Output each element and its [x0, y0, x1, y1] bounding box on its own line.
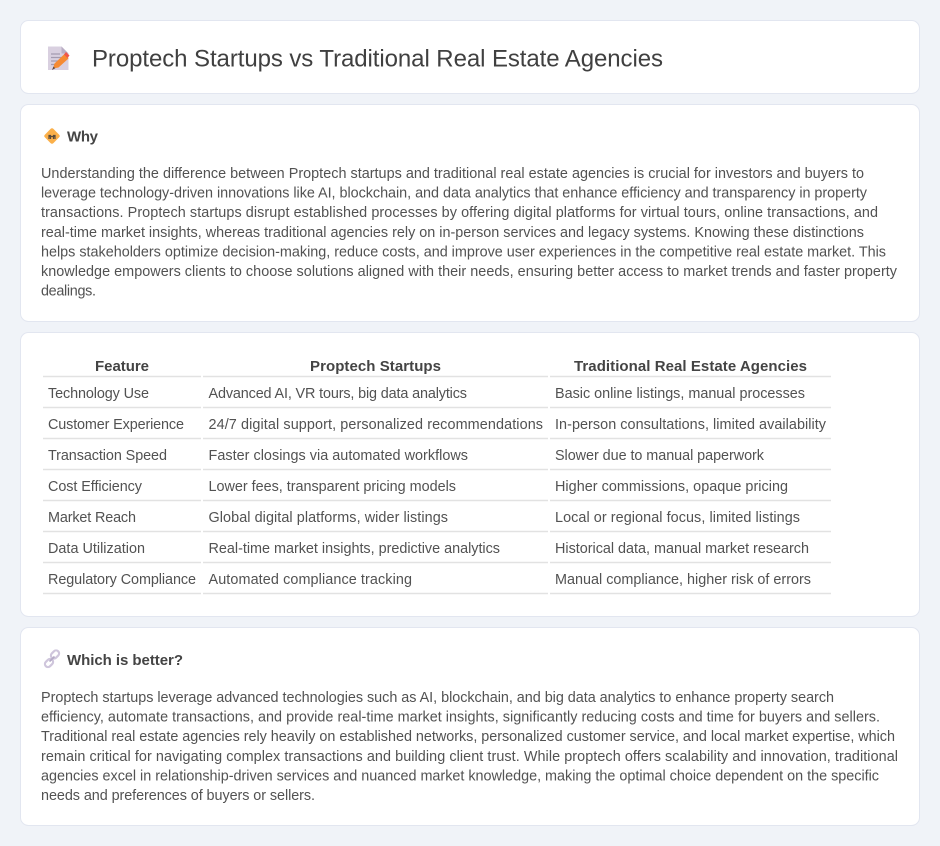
row: market reach [43, 510, 831, 532]
row: data utilization [43, 541, 831, 562]
row: customer experience [43, 417, 831, 438]
row: cost efficiency: Lower fees, transparent pricing models [208, 479, 456, 495]
icon: document with pencil [48, 46, 70, 70]
row: market reach: Global digital platforms, wider listings [208, 510, 448, 526]
row: regulatory compliance: Manual compliance, higher risk of errors [555, 572, 811, 588]
row: data utilization: Historical data, manual market research [555, 541, 809, 557]
row: technology use: Technology Use [48, 386, 149, 402]
row: cost efficiency: Cost Efficiency [48, 479, 143, 495]
panel: which is better [20, 628, 920, 826]
panel: comparison table [20, 332, 920, 616]
row: cost efficiency: Higher commissions, opaque pricing [555, 479, 788, 495]
table header row [43, 358, 831, 376]
text block: why: real-time market insights, whereas traditional agencies rely on in-person services and legacy systems. Knowing these distinctions [41, 225, 864, 241]
text block: which is better: needs and preferences of buyers or sellers. [41, 788, 315, 804]
table header row: Traditional Real Estate Agencies [574, 358, 807, 375]
text block: which is better: remain critical for navigating complex transactions and building client trust. While proptech offers scalability and innovation, traditional [41, 749, 898, 765]
row: transaction speed [43, 448, 831, 470]
row: customer experience: In-person consultations, limited availability [555, 417, 827, 433]
text block: why: transactions. Proptech startups disrupt established processes by offering digital platforms for virtual tours, online transactions, and [41, 205, 878, 221]
table header row: Feature [95, 358, 149, 375]
panel: why [20, 104, 920, 322]
row: data utilization: Real-time market insights, predictive analytics [208, 541, 500, 557]
row: market reach: Market Reach [48, 510, 136, 526]
text block: why: dealings. [41, 284, 96, 300]
row: technology use: Advanced AI, VR tours, big data analytics [208, 386, 467, 402]
row: technology use: Basic online listings, manual processes [555, 386, 805, 402]
row: regulatory compliance: Automated compliance tracking [208, 572, 412, 588]
text block: which is better: efficiency, automate transactions, and provide real-time market insights, significantly reducing costs and time for buyers and sellers. [41, 710, 880, 726]
text block: which is better: Traditional real estate agencies rely heavily on established networks, personalized customer service, and local market expertise, which [41, 729, 895, 745]
text block: which is better: Proptech startups leverage advanced technologies such as AI, blockchain, and big data analytics to enhance property search [41, 690, 834, 706]
row: regulatory compliance [43, 572, 831, 594]
heading: why: Why [67, 128, 99, 146]
text block: why: Understanding the difference between Proptech startups and traditional real estate agencies is crucial for investors and buyers to [41, 166, 864, 182]
text block: which is better: agencies excel in relationship-driven services and nuanced market knowledge, making the optimal choice dependent on the specific [41, 768, 879, 784]
row: regulatory compliance: Regulatory Compliance [48, 572, 196, 588]
row: cost efficiency [43, 479, 831, 500]
text block: why: helps stakeholders optimize decision-making, reduce costs, and improve user experiences in the competitive real estate market. This [41, 244, 886, 260]
panel: header [20, 20, 920, 94]
row: technology use [43, 386, 831, 408]
row: customer experience: Customer Experience [48, 417, 184, 433]
title: Proptech Startups vs Traditional Real Estate Agencies [92, 46, 663, 72]
table header row: Proptech Startups [310, 358, 441, 375]
row: market reach: Local or regional focus, limited listings [555, 510, 800, 526]
text block: which is better [41, 690, 898, 804]
row: data utilization: Data Utilization [48, 541, 145, 557]
icon: diamond sign [44, 128, 60, 144]
row: transaction speed: Slower due to manual paperwork [555, 448, 765, 464]
text block: why: leverage technology-driven innovations like AI, blockchain, and data analytics that enhance efficiency and transparency in property [41, 186, 868, 202]
row: customer experience: 24/7 digital support, personalized recommendations [208, 417, 543, 433]
text block: why: knowledge empowers clients to choose solutions aligned with their needs, ensuring better access to market trends and faster property [41, 264, 898, 280]
icon: chain link [44, 649, 60, 668]
row: transaction speed: Transaction Speed [48, 448, 167, 464]
heading: which is better: Which is better? [67, 652, 183, 669]
row: transaction speed: Faster closings via automated workflows [208, 448, 468, 464]
text block: why [41, 166, 898, 300]
